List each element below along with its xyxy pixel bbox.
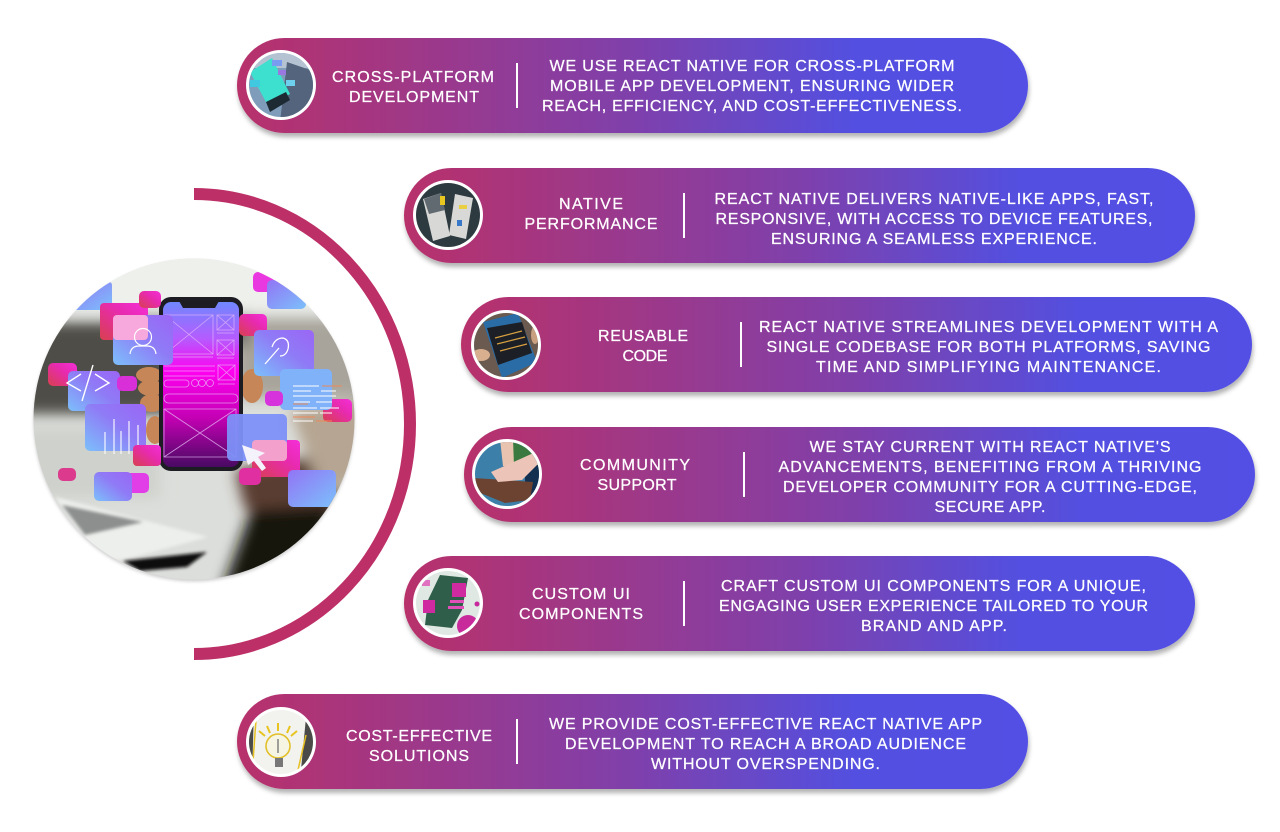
phone xyxy=(159,297,243,471)
description: REACT NATIVE DELIVERS NATIVE-LIKE APPS, FAST, xyxy=(714,191,1154,208)
description: WE PROVIDE COST-EFFECTIVE REACT NATIVE APP xyxy=(549,716,982,733)
semicircular arc xyxy=(194,194,410,654)
title xyxy=(332,69,494,106)
title: DEVELOPMENT xyxy=(349,89,479,106)
title xyxy=(346,728,492,765)
panel: custom UI components xyxy=(404,556,1195,651)
icon: UI phone xyxy=(412,568,484,640)
title: CUSTOM UI xyxy=(532,586,630,603)
description: BRAND AND APP. xyxy=(861,618,1007,635)
tiles xyxy=(76,282,112,310)
description: DEVELOPER COMMUNITY FOR A CUTTING-EDGE, xyxy=(783,479,1197,496)
description: SINGLE CODEBASE FOR BOTH PLATFORMS, SAVING xyxy=(766,339,1210,356)
icon: hand holding phone with teal screen xyxy=(245,50,317,122)
title: COST-EFFECTIVE xyxy=(346,728,492,745)
description: REACT NATIVE STREAMLINES DEVELOPMENT WITH A xyxy=(759,319,1218,336)
title xyxy=(524,196,658,233)
title xyxy=(580,457,690,494)
title: CODE xyxy=(622,348,668,365)
laptop xyxy=(55,497,208,560)
title xyxy=(519,586,643,623)
panel: cross-platform development xyxy=(237,38,1028,133)
title: PERFORMANCE xyxy=(524,216,658,233)
description: TIME AND SIMPLIFYING MAINTENANCE. xyxy=(816,359,1161,376)
description: MOBILE APP DEVELOPMENT, ENSURING WIDER xyxy=(550,78,954,95)
description: WE USE REACT NATIVE FOR CROSS-PLATFORM xyxy=(550,58,954,75)
title: NATIVE xyxy=(559,196,623,213)
description: RESPONSIVE, WITH ACCESS TO DEVICE FEATURES, xyxy=(716,211,1152,228)
title: REUSABLE xyxy=(598,328,688,345)
central illustration: phone with app tiles xyxy=(32,258,356,583)
title xyxy=(598,328,688,365)
description: ADVANCEMENTS, BENEFITING FROM A THRIVING xyxy=(778,459,1202,476)
icon: phone with code screen xyxy=(470,310,542,382)
description: REACH, EFFICIENCY, AND COST-EFFECTIVENESS. xyxy=(542,98,962,115)
icon: two phone screens xyxy=(412,180,484,252)
title: SOLUTIONS xyxy=(369,748,469,765)
title: CROSS-PLATFORM xyxy=(332,69,494,86)
panel: community support xyxy=(464,427,1255,522)
description xyxy=(759,319,1218,376)
description xyxy=(549,716,982,773)
description xyxy=(542,58,962,115)
title: COMMUNITY xyxy=(580,457,690,474)
description: SECURE APP. xyxy=(934,499,1046,516)
panel: reusable code xyxy=(461,297,1252,392)
panel: cost-effective solutions xyxy=(237,694,1028,789)
hands xyxy=(136,367,263,444)
description: DEVELOPMENT TO REACH A BROAD AUDIENCE xyxy=(565,736,966,753)
title: COMPONENTS xyxy=(519,606,643,623)
description: WE STAY CURRENT WITH REACT NATIVE'S xyxy=(810,439,1170,456)
icon: light bulb with dollar sign xyxy=(245,707,318,780)
title: SUPPORT xyxy=(598,477,677,494)
icon: stacked hands xyxy=(471,439,545,511)
description xyxy=(719,578,1148,635)
description: WITHOUT OVERSPENDING. xyxy=(651,756,880,773)
description xyxy=(778,439,1202,516)
panel: native performance xyxy=(404,168,1195,263)
description: ENGAGING USER EXPERIENCE TAILORED TO YOUR xyxy=(719,598,1148,615)
description: ENSURING A SEAMLESS EXPERIENCE. xyxy=(771,231,1097,248)
description xyxy=(714,191,1154,248)
description: CRAFT CUSTOM UI COMPONENTS FOR A UNIQUE, xyxy=(721,578,1146,595)
